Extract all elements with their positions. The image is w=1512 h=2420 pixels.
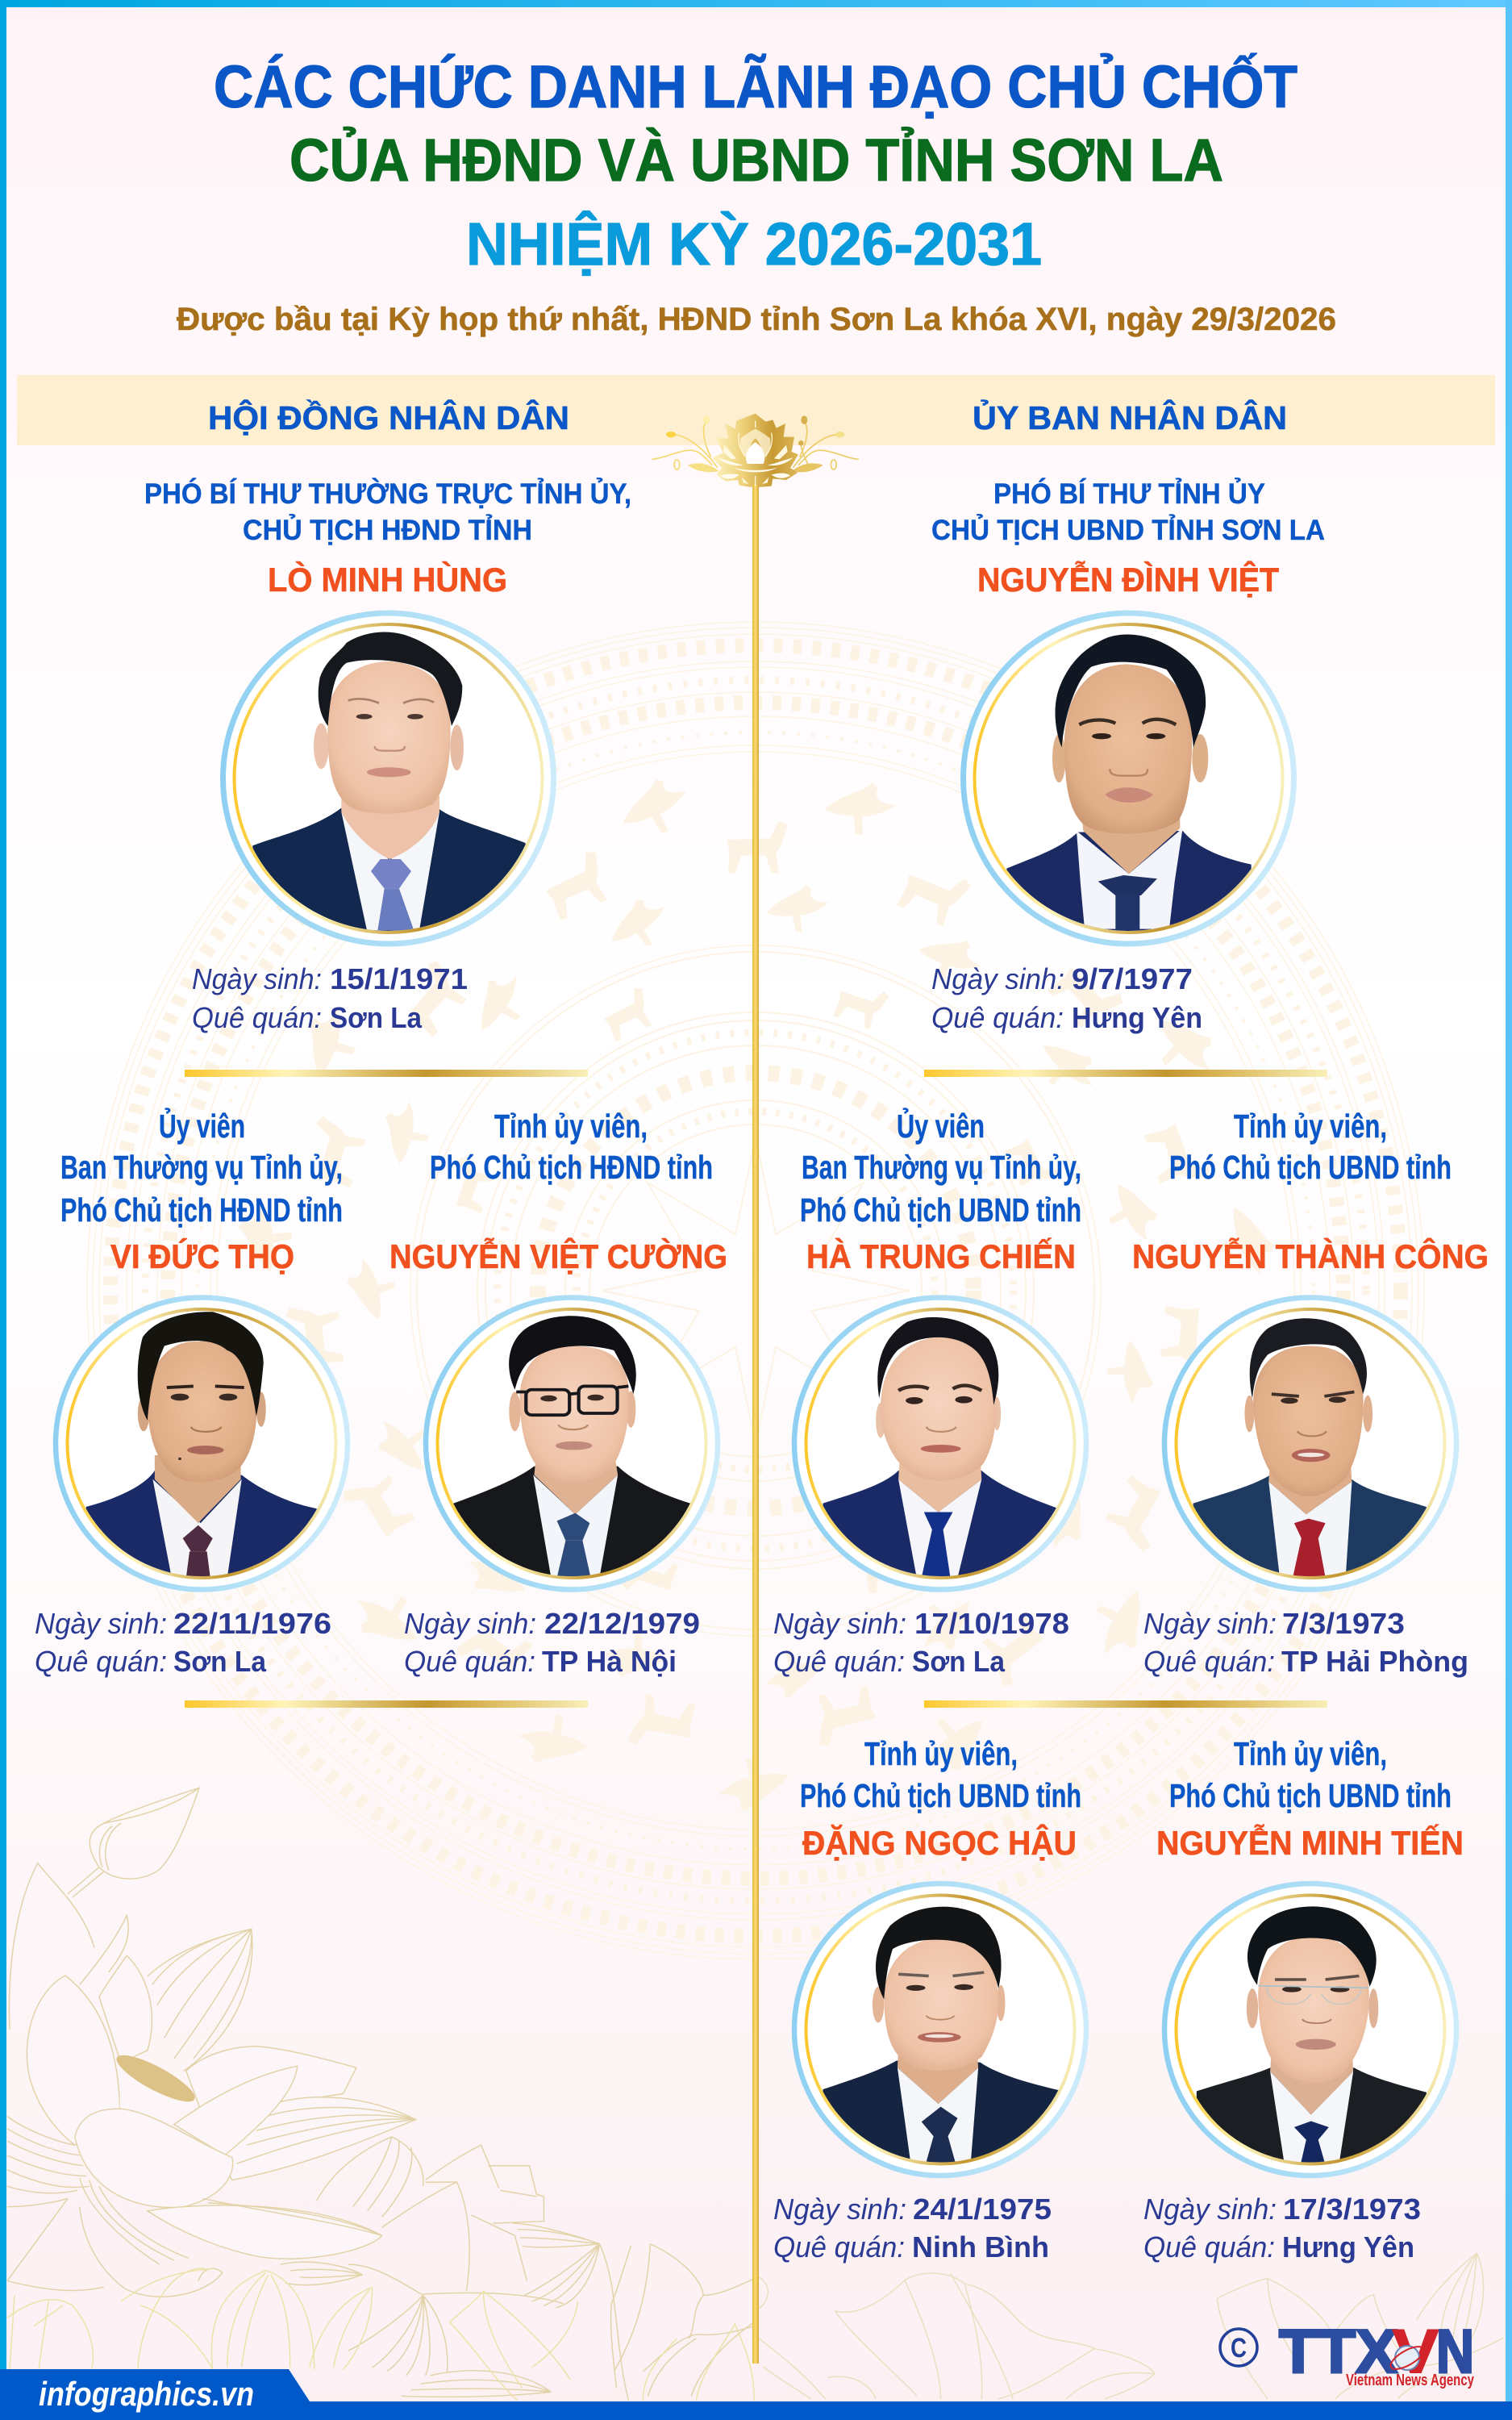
profile card: Hà Trung Chiến xyxy=(773,1108,1086,1678)
logo: copyright and TTXVN Vietnam News Agency: V xyxy=(1393,2318,1439,2386)
title block: CỦA HĐND VÀ UBND TỈNH SƠN LA xyxy=(289,127,1223,194)
divider: UBND row one xyxy=(924,1070,1327,1077)
title block: CÁC CHỨC DANH LÃNH ĐẠO CHỦ CHỐT xyxy=(214,53,1297,120)
portrait xyxy=(56,1297,348,1617)
bio: Quê quán: xyxy=(931,1001,1064,1034)
position text xyxy=(144,478,631,546)
bio: Quê quán: xyxy=(1143,2230,1275,2264)
name: LÒ MINH HÙNG xyxy=(268,560,507,599)
bio: Hưng Yên xyxy=(1282,2230,1414,2264)
bio: Ngày sinh: xyxy=(1143,2193,1277,2226)
bio: Hưng Yên xyxy=(1072,1001,1202,1034)
bio: Quê quán: xyxy=(773,1645,905,1678)
logo: copyright and TTXVN Vietnam News Agency: N xyxy=(1436,2318,1474,2386)
position text xyxy=(931,478,1325,546)
bio: Sơn La xyxy=(912,1645,1006,1678)
title block: Được bầu tại Kỳ họp thứ nhất, HĐND tỉnh Sơn La khóa XVI, ngày 29/3/2026 xyxy=(177,302,1336,337)
position text xyxy=(1169,1108,1452,1186)
position text: CHỦ TỊCH HĐND TỈNH xyxy=(243,514,532,546)
position text: Ủy viên xyxy=(897,1108,985,1145)
position text: Ban Thường vụ Tỉnh ủy, xyxy=(802,1149,1081,1186)
bio: Ngày sinh: xyxy=(931,962,1064,995)
bio: 22/11/1976 xyxy=(173,1607,331,1640)
bio: Quê quán: xyxy=(404,1645,535,1678)
name: NGUYỄN ĐÌNH VIỆT xyxy=(977,560,1279,599)
icon: gold lotus ornament xyxy=(652,414,859,487)
bio xyxy=(1143,2193,1421,2264)
footer tab: infographics.vn: infographics.vn xyxy=(39,2375,254,2413)
column: Hội đồng nhân dân top leader xyxy=(144,478,631,1034)
position text xyxy=(1169,1735,1452,1814)
bio: Ngày sinh: xyxy=(1143,1607,1277,1640)
bio: 9/7/1977 xyxy=(1072,962,1193,995)
bio: Ngày sinh: xyxy=(773,2193,906,2226)
bio: Ngày sinh: xyxy=(404,1607,536,1640)
divider: HĐND row one xyxy=(185,1070,588,1077)
background: lotus line art bottom right xyxy=(758,2253,1503,2399)
position text: Tỉnh ủy viên, xyxy=(864,1735,1018,1772)
bio: Quê quán: xyxy=(35,1645,167,1678)
position text xyxy=(430,1108,713,1186)
logo: copyright and TTXVN Vietnam News Agency: TTX xyxy=(1279,2318,1397,2386)
profile card: Nguyễn Minh Tiến xyxy=(1143,1735,1464,2264)
bio: 22/12/1979 xyxy=(544,1607,700,1640)
title block: NHIỆM KỲ 2026-2031 xyxy=(466,211,1042,277)
bio: 7/3/1973 xyxy=(1282,1607,1405,1640)
name: NGUYỄN VIỆT CƯỜNG xyxy=(389,1237,727,1275)
bio: Quê quán: xyxy=(1143,1645,1275,1678)
bio xyxy=(931,962,1202,1034)
section banner: ỦY BAN NHÂN DÂN xyxy=(973,399,1287,436)
bio: 17/3/1973 xyxy=(1283,2193,1421,2226)
profile card: Nguyễn Việt Cường xyxy=(389,1108,727,1678)
bio: 17/10/1978 xyxy=(914,1607,1069,1640)
position text: Ban Thường vụ Tỉnh ủy, xyxy=(60,1149,343,1186)
divider: HĐND row two xyxy=(185,1700,588,1708)
position text: Phó Chủ tịch HĐND tỉnh xyxy=(430,1149,713,1186)
bio: Quê quán: xyxy=(192,1001,322,1034)
name: HÀ TRUNG CHIẾN xyxy=(806,1237,1076,1275)
bio: 15/1/1971 xyxy=(330,962,468,995)
divider: UBND row two xyxy=(924,1700,1327,1708)
portrait: Nguyễn Đình Việt xyxy=(963,613,1293,954)
bio: 24/1/1975 xyxy=(913,2193,1052,2226)
bio xyxy=(773,1607,1069,1678)
bio: Quê quán: xyxy=(773,2230,905,2264)
name: NGUYỄN MINH TIẾN xyxy=(1156,1823,1464,1862)
bio: Ngày sinh: xyxy=(192,962,322,995)
background: drum animal motifs xyxy=(234,774,1277,1812)
profile card: Vi Đức Thọ xyxy=(35,1108,348,1678)
bio: Ngày sinh: xyxy=(35,1607,167,1640)
logo: copyright and TTXVN Vietnam News Agency: Vietnam News Agency xyxy=(1346,2372,1475,2389)
position text: Tỉnh ủy viên, xyxy=(1234,1735,1387,1772)
position text xyxy=(800,1108,1081,1229)
bio xyxy=(1143,1607,1468,1678)
position text xyxy=(60,1108,343,1229)
position text: Ủy viên xyxy=(159,1108,245,1145)
portrait xyxy=(426,1297,718,1617)
bio xyxy=(404,1607,700,1678)
profile card: Đặng Ngọc Hậu xyxy=(773,1735,1086,2264)
section banner xyxy=(17,375,1495,445)
portrait: Lò Minh Hùng xyxy=(223,613,553,946)
name: VI ĐỨC THỌ xyxy=(110,1237,294,1275)
position text: Phó Chủ tịch UBND tỉnh xyxy=(800,1777,1081,1814)
position text xyxy=(800,1735,1081,1814)
name: NGUYỄN THÀNH CÔNG xyxy=(1132,1237,1489,1275)
background: lotus line art bottom left xyxy=(7,1788,754,2401)
section banner: HỘI ĐỒNG NHÂN DÂN xyxy=(208,399,569,436)
portrait xyxy=(794,1884,1086,2197)
position text: PHÓ BÍ THƯ TỈNH ỦY xyxy=(993,478,1265,510)
title block xyxy=(177,53,1336,337)
profile card: Nguyễn Thành Công xyxy=(1132,1108,1489,1678)
bio xyxy=(192,962,468,1034)
position text: PHÓ BÍ THƯ THƯỜNG TRỰC TỈNH ỦY, xyxy=(144,478,631,510)
bio: TP Hải Phòng xyxy=(1281,1645,1468,1678)
center gold divider line xyxy=(752,484,759,2364)
bio: Ninh Bình xyxy=(912,2230,1049,2264)
footer bar xyxy=(0,2401,1512,2420)
bio xyxy=(35,1607,331,1678)
bio: Ngày sinh: xyxy=(773,1607,906,1640)
position text: Phó Chủ tịch HĐND tỉnh xyxy=(60,1191,343,1229)
portrait xyxy=(1164,1297,1456,1617)
bio xyxy=(773,2193,1052,2264)
logo: copyright and TTXVN Vietnam News Agency: C xyxy=(1231,2333,1247,2364)
background: bronze drum pattern xyxy=(87,622,1424,1959)
position text: Tỉnh ủy viên, xyxy=(494,1108,648,1145)
portrait xyxy=(794,1297,1086,1617)
portrait xyxy=(1164,1884,1456,2197)
background: pale lotus line art along bottom xyxy=(7,2268,754,2401)
position text: Tỉnh ủy viên, xyxy=(1234,1108,1387,1145)
footer tab: infographics.vn xyxy=(0,2369,310,2420)
bio: Sơn La xyxy=(173,1645,267,1678)
column: Ủy ban nhân dân top leader xyxy=(931,478,1325,1034)
logo: copyright and TTXVN Vietnam News Agency xyxy=(1220,2318,1475,2389)
bio: Sơn La xyxy=(330,1001,423,1034)
name: ĐẶNG NGỌC HẬU xyxy=(802,1823,1077,1862)
bio: TP Hà Nội xyxy=(542,1645,677,1678)
position text: Phó Chủ tịch UBND tỉnh xyxy=(800,1191,1081,1229)
position text: CHỦ TỊCH UBND TỈNH SƠN LA xyxy=(931,514,1325,546)
